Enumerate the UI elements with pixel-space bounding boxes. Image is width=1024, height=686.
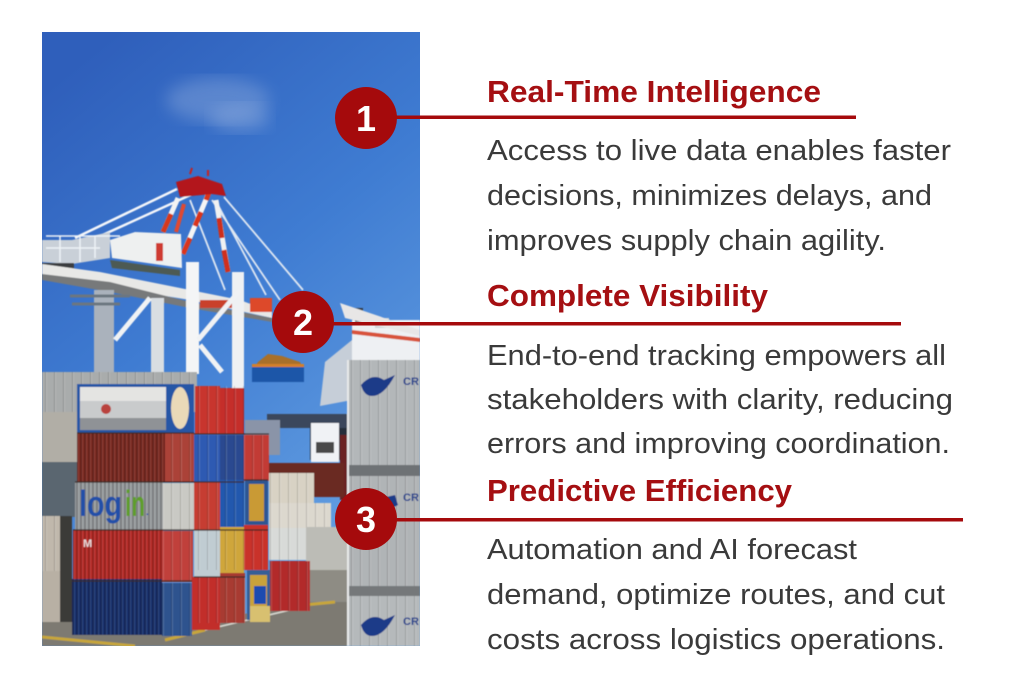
crane xyxy=(42,168,303,390)
number badge 3 xyxy=(335,488,397,550)
item 3: Predictive Efficiency xyxy=(335,473,963,656)
number badge 1: 1 xyxy=(356,98,376,139)
container stack: in xyxy=(125,483,145,524)
connector line 1 xyxy=(366,116,856,119)
photo: container port with crane xyxy=(42,32,420,646)
item 2: Complete Visibility xyxy=(272,278,953,460)
body text 3: Automation and AI forecast xyxy=(487,534,857,566)
body text 2: errors and improving coordination. xyxy=(487,428,950,460)
body text 1: Access to live data enables faster xyxy=(487,135,951,167)
body text 3: costs across logistics operations. xyxy=(487,624,945,656)
hanging container xyxy=(252,354,304,382)
body text 2: End-to-end tracking empowers all xyxy=(487,340,946,372)
body text 3: demand, optimize routes, and cut xyxy=(487,579,945,611)
item 1: Real-Time Intelligence xyxy=(335,74,951,257)
body text 1 xyxy=(487,135,951,257)
right container stack xyxy=(347,360,420,646)
number badge 1 xyxy=(335,87,397,149)
connector line 2 xyxy=(303,322,901,326)
body text 1: decisions, minimizes delays, and xyxy=(487,180,932,212)
heading 3: Predictive Efficiency xyxy=(487,473,793,508)
background building xyxy=(42,372,197,626)
number badge 3: 3 xyxy=(356,499,376,540)
container stack: . xyxy=(146,507,149,518)
body text 2 xyxy=(487,340,953,460)
ship xyxy=(267,303,420,500)
number badge 2: 2 xyxy=(293,302,313,343)
number badge 2 xyxy=(272,291,334,353)
container lettering: log xyxy=(79,483,122,524)
container stack xyxy=(72,384,310,636)
body text 3 xyxy=(487,534,945,656)
container stack: M xyxy=(83,538,92,550)
heading 1: Real-Time Intelligence xyxy=(487,74,821,109)
right container stack: CR xyxy=(403,616,419,628)
heading 2: Complete Visibility xyxy=(487,278,769,313)
body text 2: stakeholders with clarity, reducing xyxy=(487,384,953,416)
connector line 3 xyxy=(366,518,963,522)
right container stack: CR xyxy=(403,376,419,388)
body text 1: improves supply chain agility. xyxy=(487,225,886,257)
right container stack: CR xyxy=(403,492,419,504)
ground xyxy=(42,601,348,646)
back stacks and scaffold xyxy=(245,420,348,573)
